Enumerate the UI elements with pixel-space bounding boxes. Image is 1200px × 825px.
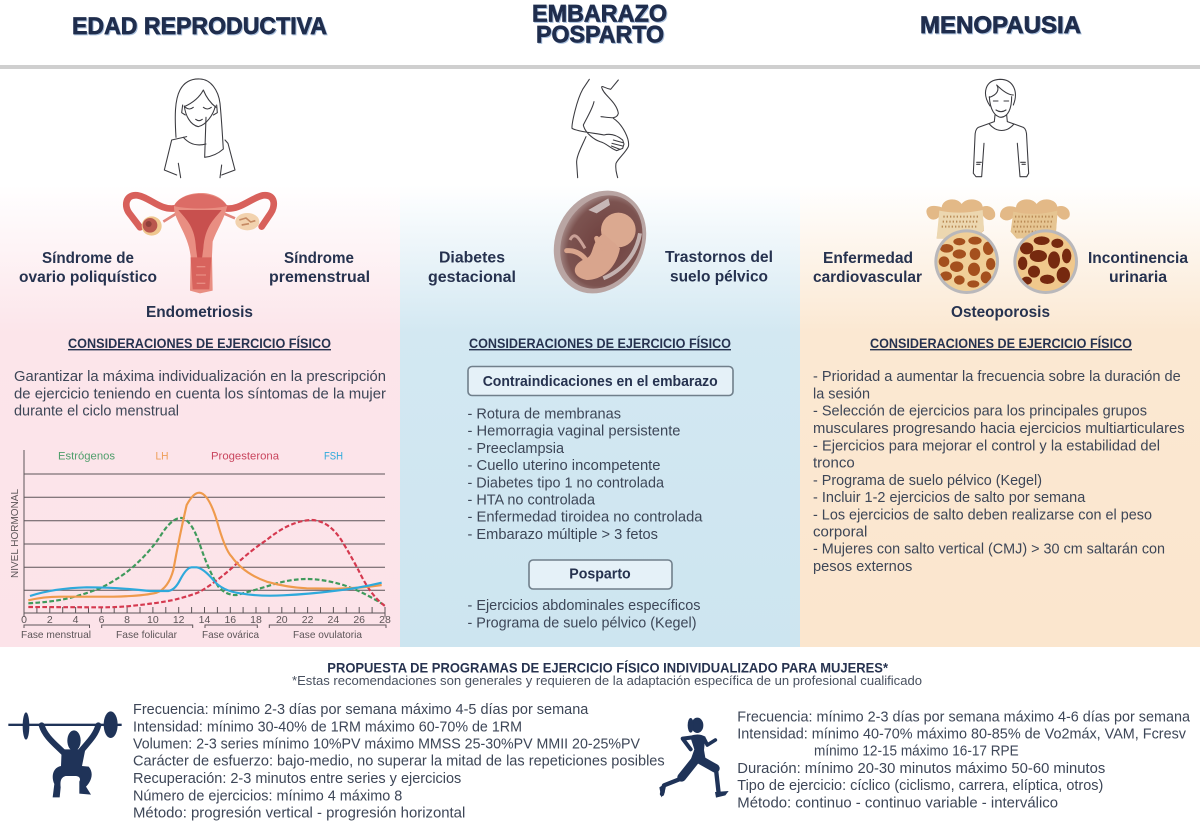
legend: hormones xyxy=(58,450,343,462)
button: posparto: Posparto xyxy=(569,566,631,582)
list: contraindicaciones: - Embarazo múltiple > 3 fetos xyxy=(468,527,658,543)
list: fuerza: Frecuencia: mínimo 2-3 días por semana máximo 4-5 días por semana xyxy=(133,702,589,718)
list: fuerza: Método: progresión vertical - progresión horizontal xyxy=(133,806,465,822)
label: enfermedad cardiovascular: cardiovascular xyxy=(813,269,922,286)
list: contraindicaciones: - Rotura de membranas xyxy=(468,406,621,422)
list: contraindicaciones: - Enfermedad tiroidea no controlada xyxy=(468,510,703,526)
list: recomendaciones menopausia: la sesión xyxy=(813,386,870,402)
x axis numbers: 12 xyxy=(173,614,185,626)
list: recomendaciones menopausia xyxy=(813,369,1185,575)
x axis numbers: 14 xyxy=(199,614,210,626)
label: síndrome premenstrual xyxy=(269,250,370,286)
label: síndrome de ovario poliquístico xyxy=(19,250,157,286)
phase labels: Fase ovulatoria xyxy=(293,629,362,641)
list: recomendaciones menopausia: - Prioridad a aumentar la frecuencia sobre la duración de xyxy=(813,369,1181,385)
list: posparto: - Programa de suelo pélvico (Kegel) xyxy=(468,615,696,631)
list: contraindicaciones: - Diabetes tipo 1 no controlada xyxy=(468,475,665,491)
list: recomendaciones menopausia: - Mujeres con salto vertical (CMJ) > 30 cm saltarán con xyxy=(813,542,1165,558)
legend: hormones: FSH xyxy=(324,450,343,462)
icon: pregnant woman xyxy=(572,79,629,178)
list: cardio: mínimo 12-15 máximo 16-17 RPE xyxy=(814,744,1019,760)
text block: individualización: Garantizar la máxima individualización en la prescripción xyxy=(14,369,386,385)
icon: woman with long hair xyxy=(164,79,235,178)
button: contraindicaciones xyxy=(468,366,733,396)
list: contraindicaciones: - Hemorragia vaginal persistente xyxy=(468,424,680,440)
list: cardio: Intensidad: mínimo 40-70% máximo 80-85% de Vo2máx, VAM, Fcresv xyxy=(737,726,1187,742)
note: *Estas recomendaciones son generales y requieren de la adaptación específica de un profesional cualificado xyxy=(292,674,922,688)
heading: embarazo posparto xyxy=(532,0,667,48)
panel: embarazo background xyxy=(400,185,800,647)
heading: propuesta: PROPUESTA DE PROGRAMAS DE EJERCICIO FÍSICO INDIVIDUALIZADO PARA MUJERES* xyxy=(327,660,889,676)
label: incontinencia urinaria xyxy=(1088,250,1188,286)
label: incontinencia urinaria: Incontinencia xyxy=(1088,250,1188,267)
button: contraindicaciones: Contraindicaciones en el embarazo xyxy=(483,373,718,390)
label: síndrome de ovario poliquístico: ovario poliquístico xyxy=(19,269,157,286)
panel: edad reproductiva background xyxy=(0,185,400,647)
list: cardio xyxy=(737,710,1191,812)
list: contraindicaciones: - HTA no controlada xyxy=(468,492,596,508)
icon: uterus and ovaries xyxy=(126,193,274,293)
icon: mature woman xyxy=(973,79,1029,177)
list: recomendaciones menopausia: - Los ejercicios de salto deben realizarse con el peso xyxy=(813,507,1152,523)
phase labels xyxy=(21,629,362,641)
list: posparto: - Ejercicios abdominales específicos xyxy=(468,598,700,614)
heading: embarazo posparto: POSPARTO xyxy=(536,22,664,48)
x axis numbers xyxy=(21,614,391,626)
heading: menopausia: MENOPAUSIA xyxy=(920,12,1081,39)
list: cardio: Frecuencia: mínimo 2-3 días por semana máximo 4-6 días por semana xyxy=(737,710,1191,726)
heading: edad reproductiva: EDAD REPRODUCTIVA xyxy=(72,13,327,40)
heading: consideraciones: CONSIDERACIONES DE EJERCICIO FÍSICO xyxy=(870,335,1132,351)
heading: consideraciones: CONSIDERACIONES DE EJERCICIO FÍSICO xyxy=(68,335,331,351)
x axis numbers: 22 xyxy=(302,614,314,626)
list: recomendaciones menopausia: - Incluir 1-2 ejercicios de salto por semana xyxy=(813,490,1086,506)
panel: embarazo content xyxy=(428,174,773,631)
x axis numbers: 24 xyxy=(328,614,339,626)
list: recomendaciones menopausia: musculares progresando hacia ejercicios multiarticulares xyxy=(813,421,1185,437)
list: fuerza: Volumen: 2-3 series mínimo 10%PV máximo MMSS 25-30%PV MMII 20-25%PV xyxy=(133,737,640,753)
list: recomendaciones menopausia: tronco xyxy=(813,456,855,472)
list: cardio: Tipo de ejercicio: cíclico (ciclismo, carrera, elíptica, otros) xyxy=(737,778,1103,794)
list: fuerza xyxy=(133,702,665,822)
x axis numbers: 10 xyxy=(147,614,159,626)
panel: menopausia background xyxy=(800,185,1200,647)
label: enfermedad cardiovascular: Enfermedad xyxy=(823,250,913,267)
label: endometriosis: Endometriosis xyxy=(146,304,253,321)
x axis numbers: 8 xyxy=(124,614,130,626)
legend: hormones: Estrógenos xyxy=(58,450,116,462)
icon: weightlifter xyxy=(8,711,122,797)
x axis numbers: 18 xyxy=(250,614,262,626)
list: fuerza: Número de ejercicios: mínimo 4 máximo 8 xyxy=(133,788,402,804)
x axis numbers: 20 xyxy=(276,614,288,626)
text block: individualización: durante el ciclo menstrual xyxy=(14,404,179,420)
section: propuesta de programas xyxy=(8,660,1191,822)
list: contraindicaciones: - Cuello uterino incompetente xyxy=(468,458,660,474)
list: recomendaciones menopausia: - Programa de suelo pélvico (Kegel) xyxy=(813,473,1042,489)
list: fuerza: Carácter de esfuerzo: bajo-medio, no superar la mitad de las repeticiones posibles xyxy=(133,754,665,770)
y axis label: NIVEL HORMONAL xyxy=(9,489,21,578)
list: posparto xyxy=(468,598,700,631)
panel: menopausia content xyxy=(813,199,1188,575)
icon: vertebrae and bone tissue xyxy=(926,199,1078,294)
label: trastornos del suelo pélvico: Trastornos del xyxy=(665,249,773,266)
label: síndrome de ovario poliquístico: Síndrome de xyxy=(42,250,134,267)
label: osteoporosis: Osteoporosis xyxy=(951,304,1050,321)
icon: runner xyxy=(659,718,729,798)
label: síndrome premenstrual: Síndrome xyxy=(284,250,354,267)
label: trastornos del suelo pélvico: suelo pélvico xyxy=(670,268,768,286)
text block: individualización: de ejercicio teniendo en cuenta los síntomas de la mujer xyxy=(14,386,386,402)
x axis numbers: 4 xyxy=(73,614,79,626)
phase labels: Fase ovárica xyxy=(202,629,259,641)
list: recomendaciones menopausia: - Ejercicios para mejorar el control y la estabilidad del xyxy=(813,438,1160,454)
label: diabetes gestacional xyxy=(428,250,516,286)
x axis numbers: 2 xyxy=(47,614,53,626)
list: recomendaciones menopausia: - Selección de ejercicios para los principales grupos xyxy=(813,404,1147,420)
legend: hormones: LH xyxy=(156,450,169,462)
list: recomendaciones menopausia: pesos externos xyxy=(813,559,912,575)
panel: edad reproductiva content xyxy=(9,193,391,641)
heading: embarazo posparto: EMBARAZO xyxy=(532,0,667,28)
list: cardio: Duración: mínimo 20-30 minutos máximo 50-60 minutos xyxy=(737,761,1105,777)
heading: consideraciones: CONSIDERACIONES DE EJERCICIO FÍSICO xyxy=(469,335,731,351)
list: contraindicaciones xyxy=(468,406,703,543)
x axis numbers: 16 xyxy=(224,614,236,626)
label: incontinencia urinaria: urinaria xyxy=(1109,269,1167,286)
label: trastornos del suelo pélvico xyxy=(665,249,773,286)
phase labels: Fase menstrual xyxy=(21,629,91,641)
chart: hormone levels across the cycle xyxy=(9,450,391,641)
x axis numbers: 26 xyxy=(353,614,365,626)
x axis numbers: 28 xyxy=(379,614,391,626)
x axis numbers: 6 xyxy=(99,614,105,626)
label: síndrome premenstrual: premenstrual xyxy=(269,269,370,286)
text block: individualización xyxy=(14,369,386,420)
label: diabetes gestacional: Diabetes xyxy=(439,250,505,266)
icon: fetus xyxy=(536,174,664,310)
x axis numbers: 0 xyxy=(21,614,27,626)
button: posparto xyxy=(529,560,672,589)
legend: hormones: Progesterona xyxy=(211,450,280,462)
list: cardio: Método: continuo - continuo variable - interválico xyxy=(737,796,1058,812)
list: contraindicaciones: - Preeclampsia xyxy=(468,441,565,457)
label: enfermedad cardiovascular xyxy=(813,250,922,286)
label: diabetes gestacional: gestacional xyxy=(428,269,516,286)
phase labels: Fase folicular xyxy=(116,629,177,641)
list: recomendaciones menopausia: corporal xyxy=(813,525,867,541)
list: fuerza: Recuperación: 2-3 minutos entre series y ejercicios xyxy=(133,771,461,787)
curves xyxy=(28,493,385,607)
list: fuerza: Intensidad: mínimo 30-40% de 1RM máximo 60-70% de 1RM xyxy=(133,719,522,735)
